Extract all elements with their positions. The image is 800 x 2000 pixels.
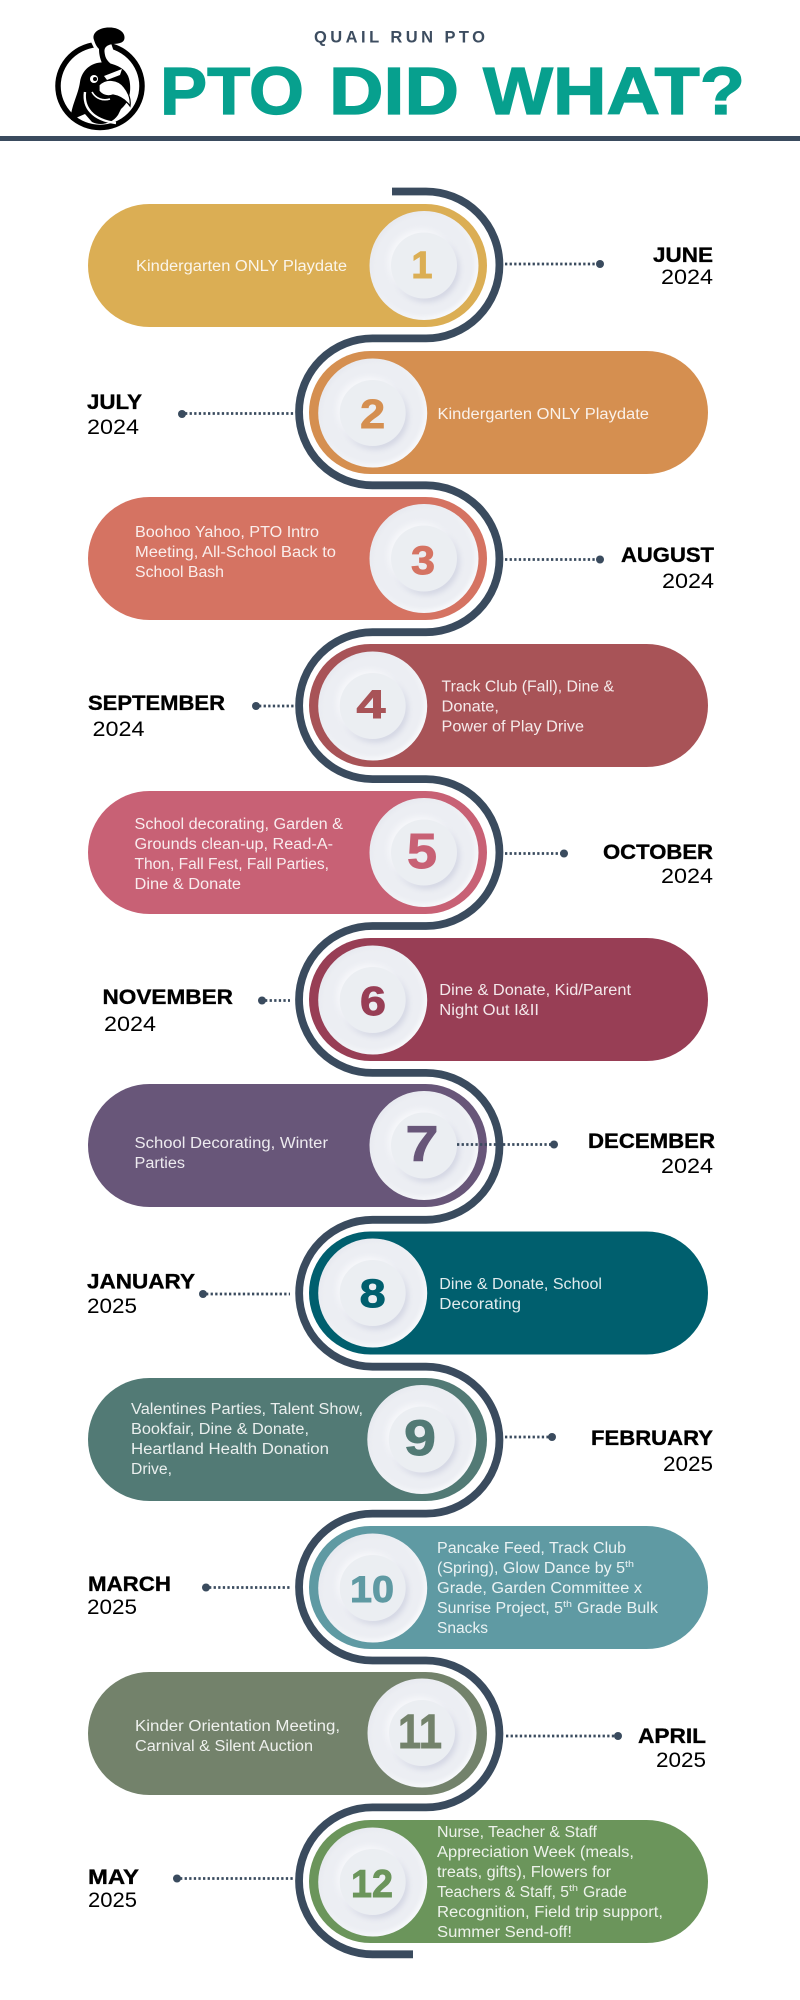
number plate bbox=[370, 798, 478, 907]
text: activities: Summer Send-off! bbox=[437, 1924, 572, 1941]
number: 1 bbox=[411, 245, 433, 287]
text: activities: Grounds clean-up, Read-A- bbox=[134, 836, 333, 853]
date label: APRIL bbox=[638, 1725, 706, 1748]
pill bbox=[88, 791, 487, 914]
number plate bbox=[318, 358, 427, 468]
text: activities: th bbox=[569, 1883, 578, 1893]
panel: month 9 February bbox=[88, 1378, 713, 1501]
number plate bbox=[318, 652, 427, 760]
date label: AUGUST bbox=[621, 544, 714, 567]
number: 7 bbox=[406, 1116, 438, 1172]
text: activities: Grade, Garden Committee x bbox=[437, 1580, 642, 1597]
date label: 2025 bbox=[87, 1295, 137, 1318]
header rule bbox=[0, 136, 800, 141]
text: activities bbox=[439, 1276, 602, 1313]
pill bbox=[309, 1820, 708, 1943]
date label: OCTOBER bbox=[603, 841, 713, 864]
text: activities: School Decorating, Winter bbox=[134, 1135, 328, 1152]
text: activities: Sunrise Project, 5 bbox=[437, 1600, 563, 1617]
date label bbox=[88, 1866, 139, 1912]
date label: NOVEMBER bbox=[102, 986, 233, 1009]
text: activities: School Bash bbox=[135, 564, 224, 581]
title: PTO bbox=[160, 55, 304, 129]
text: activities: Track Club (Fall), Dine & bbox=[442, 678, 615, 696]
text: activities: Boohoo Yahoo, PTO Intro bbox=[135, 524, 319, 541]
text: activities: Teachers & Staff, 5 bbox=[437, 1884, 569, 1901]
text: activities: th bbox=[563, 1599, 572, 1609]
header bbox=[0, 27, 800, 141]
number: 11 bbox=[398, 1706, 442, 1759]
date label: 2024 bbox=[661, 1155, 713, 1178]
panel: month 2 July bbox=[87, 351, 708, 474]
text: activities: treats, gifts), Flowers for bbox=[437, 1864, 611, 1881]
pill bbox=[88, 1084, 487, 1207]
number: 6 bbox=[360, 978, 386, 1024]
number: 5 bbox=[407, 825, 437, 879]
connector bbox=[252, 702, 294, 710]
text: activities bbox=[135, 1718, 340, 1755]
connector bbox=[173, 1874, 294, 1882]
text: activities: Dine & Donate, Kid/Parent bbox=[439, 982, 632, 999]
date label bbox=[591, 1427, 713, 1476]
connector bbox=[505, 1433, 556, 1441]
number plate bbox=[318, 1828, 427, 1936]
text: activities: Recognition, Field trip support, bbox=[437, 1904, 663, 1921]
date label: 2025 bbox=[88, 1889, 137, 1912]
text: activities: Heartland Health Donation bbox=[131, 1441, 329, 1458]
number plate bbox=[318, 946, 427, 1054]
title: DID bbox=[329, 55, 459, 129]
pill bbox=[88, 1672, 487, 1795]
text: activities: Grade Bulk bbox=[577, 1600, 658, 1617]
pill bbox=[88, 204, 487, 327]
winding timeline path bbox=[299, 192, 499, 1954]
text: activities: Valentines Parties, Talent Show, bbox=[131, 1401, 363, 1418]
text: activities: Snacks bbox=[437, 1620, 488, 1637]
text: activities bbox=[437, 1824, 663, 1941]
date label bbox=[88, 692, 225, 741]
text: activities: Meeting, All-School Back to bbox=[135, 544, 336, 561]
panel: month 1 June bbox=[88, 204, 713, 327]
connector bbox=[505, 556, 604, 564]
date label: SEPTEMBER bbox=[88, 692, 225, 715]
date label: JUNE bbox=[653, 244, 713, 267]
date label: DECEMBER bbox=[588, 1130, 715, 1153]
text: activities: Kindergarten ONLY Playdate bbox=[438, 406, 649, 423]
date label: MAY bbox=[88, 1866, 139, 1889]
panel: month 11 April bbox=[88, 1672, 706, 1795]
date label: 2025 bbox=[656, 1749, 706, 1772]
date label bbox=[87, 391, 142, 439]
panel: month 6 November bbox=[102, 938, 708, 1061]
connector bbox=[505, 850, 568, 858]
date label: 2024 bbox=[661, 865, 713, 888]
panel: month 8 January bbox=[87, 1232, 708, 1354]
panel: month 10 March bbox=[87, 1526, 708, 1649]
text: activities bbox=[134, 1135, 328, 1172]
pill bbox=[309, 1232, 708, 1354]
date label: 2025 bbox=[87, 1596, 137, 1619]
date label bbox=[102, 986, 233, 1036]
number plate bbox=[370, 211, 478, 320]
number plate bbox=[370, 504, 478, 613]
text: activities: Grade bbox=[583, 1884, 627, 1901]
title bbox=[160, 55, 745, 129]
pill bbox=[309, 938, 708, 1061]
pill bbox=[309, 351, 708, 474]
number plate bbox=[370, 1091, 478, 1200]
date label bbox=[588, 1130, 715, 1178]
text: activities bbox=[439, 982, 632, 1019]
text: activities: Power of Play Drive bbox=[442, 718, 584, 736]
text: activities: Night Out I&II bbox=[439, 1002, 539, 1019]
panel: month 12 May bbox=[88, 1820, 708, 1943]
text: activities: th bbox=[625, 1559, 634, 1569]
connector bbox=[258, 996, 290, 1004]
number plate bbox=[318, 1534, 427, 1642]
date label bbox=[638, 1725, 706, 1772]
number: 2 bbox=[360, 391, 385, 437]
text: activities: Donate, bbox=[442, 698, 499, 716]
connector bbox=[506, 1732, 622, 1740]
date label: MARCH bbox=[88, 1573, 171, 1596]
date label bbox=[603, 841, 713, 888]
pill bbox=[309, 644, 708, 767]
text: activities: Carnival & Silent Auction bbox=[135, 1738, 313, 1755]
text: activities: Parties bbox=[134, 1155, 185, 1172]
date label bbox=[87, 1270, 195, 1318]
number: 3 bbox=[411, 539, 435, 583]
number plate bbox=[318, 1238, 427, 1348]
date label: 2024 bbox=[662, 570, 714, 593]
text: activities: School decorating, Garden & bbox=[134, 816, 344, 833]
title: WHAT? bbox=[483, 55, 745, 129]
connector bbox=[202, 1584, 290, 1592]
date label bbox=[621, 544, 714, 593]
date label: JANUARY bbox=[87, 1270, 195, 1294]
text: activities: Kinder Orientation Meeting, bbox=[135, 1718, 340, 1735]
pill bbox=[88, 497, 487, 620]
text: activities: (Spring), Glow Dance by 5 bbox=[437, 1560, 625, 1577]
date label: 2024 bbox=[87, 416, 139, 439]
text: activities: Kindergarten ONLY Playdate bbox=[136, 258, 347, 275]
panel: month 3 August bbox=[88, 497, 714, 620]
connector bbox=[505, 260, 604, 268]
number: 4 bbox=[356, 683, 386, 727]
connector bbox=[178, 410, 294, 418]
text: activities: Dine & Donate bbox=[134, 876, 241, 893]
text: activities: Thon, Fall Fest, Fall Parties, bbox=[134, 856, 329, 873]
text: activities: Decorating bbox=[439, 1296, 521, 1313]
panel: month 4 September bbox=[88, 644, 708, 767]
organization name: QUAIL RUN PTO bbox=[314, 28, 485, 46]
date label: JULY bbox=[87, 391, 142, 414]
date label: 2025 bbox=[663, 1453, 713, 1476]
text: activities: Pancake Feed, Track Club bbox=[437, 1540, 626, 1557]
logo: quail mascot bbox=[58, 27, 142, 128]
panel: month 5 October bbox=[88, 791, 713, 914]
text: activities bbox=[437, 1540, 658, 1637]
date label: 2024 bbox=[92, 718, 145, 741]
text: activities: Bookfair, Dine & Donate, bbox=[131, 1421, 309, 1438]
number: 10 bbox=[350, 1569, 394, 1610]
text: activities bbox=[131, 1401, 363, 1478]
text: activities: Appreciation Week (meals, bbox=[437, 1844, 634, 1861]
date label bbox=[653, 244, 713, 289]
number plate bbox=[367, 1385, 476, 1494]
pill bbox=[309, 1526, 708, 1649]
text: activities: Nurse, Teacher & Staff bbox=[437, 1824, 598, 1841]
date label: FEBRUARY bbox=[591, 1427, 713, 1450]
date label bbox=[87, 1573, 171, 1619]
number plate bbox=[368, 1678, 476, 1788]
text: activities bbox=[134, 816, 344, 893]
panel: month 7 December bbox=[88, 1084, 715, 1207]
connector bbox=[199, 1290, 290, 1298]
date label: 2024 bbox=[104, 1013, 156, 1036]
number: 9 bbox=[404, 1410, 436, 1466]
date label: 2024 bbox=[661, 266, 713, 289]
pill bbox=[88, 1378, 487, 1501]
number: 12 bbox=[351, 1863, 393, 1906]
text: activities bbox=[442, 678, 615, 736]
text: activities bbox=[135, 524, 336, 581]
text: activities: Drive, bbox=[131, 1461, 172, 1478]
number: 8 bbox=[360, 1272, 386, 1316]
connector bbox=[457, 1140, 558, 1148]
text: activities: Dine & Donate, School bbox=[439, 1276, 602, 1293]
